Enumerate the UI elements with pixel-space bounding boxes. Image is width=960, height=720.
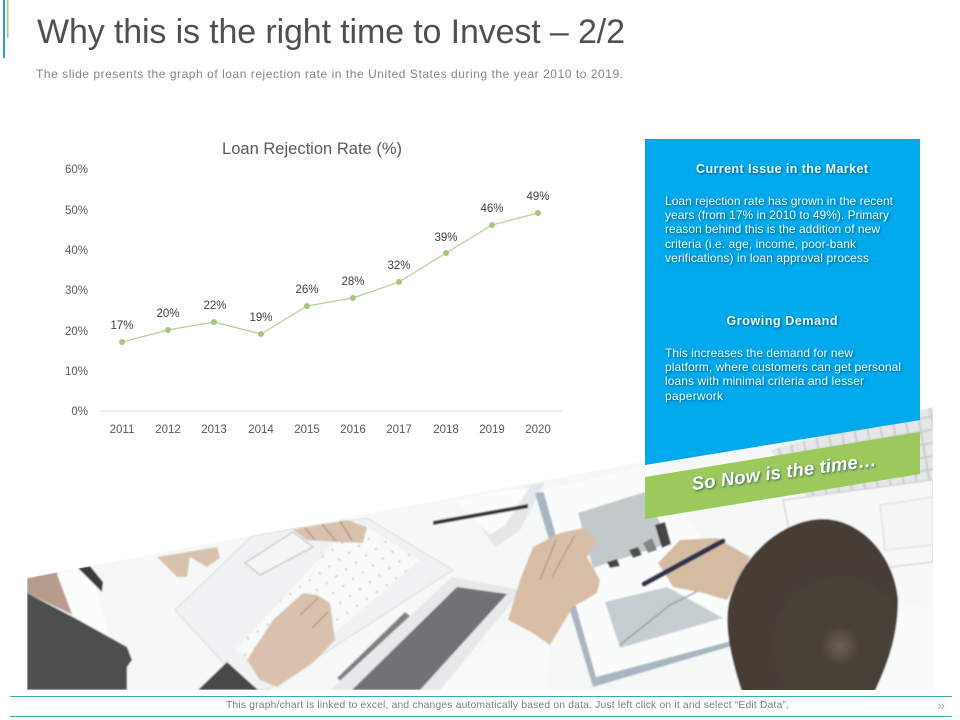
right person's flat hand and sleeve: [508, 528, 600, 646]
x axis labels: 2017: [386, 424, 412, 436]
heading: growing demand: Growing Demand: [726, 314, 838, 328]
x axis labels: 2020: [525, 424, 551, 436]
y axis labels: 0%: [71, 406, 88, 418]
data markers: [119, 210, 541, 345]
x axis labels: 2018: [433, 424, 459, 436]
photo: business people working at a desk: [20, 400, 940, 695]
y axis labels: 50%: [65, 205, 88, 217]
writing hand: [658, 538, 750, 600]
header accent lines: [3, 0, 8, 58]
heading: current issue: Current Issue in the Market: [696, 162, 869, 176]
text block: growing demand: This increases the demand for new: [665, 346, 853, 360]
text block: current issue: criteria (i.e. age, income, poor-bank: [665, 237, 857, 251]
y axis labels: 40%: [65, 245, 88, 257]
x axis labels: 2015: [294, 424, 320, 436]
footer note: This graph/chart is linked to excel, and changes automatically based on data. Just left click on it and select “Edit Data”.: [226, 700, 789, 711]
text block: current issue: years (from 17% in 2010 to 49%). Primary: [665, 208, 889, 222]
data labels: 22%: [203, 300, 227, 312]
x axis labels: 2012: [155, 424, 181, 436]
upper-right laptop: [770, 407, 933, 570]
hands on laptop: [157, 520, 367, 687]
callout: green banner: [645, 432, 920, 519]
text block: current issue: reason behind this is the addition of new: [665, 222, 880, 236]
x axis labels: 2016: [340, 424, 366, 436]
callout: green banner: So Now is the time…: [690, 449, 878, 494]
chart title: Loan Rejection Rate (%): [222, 140, 402, 158]
data labels: [110, 191, 550, 332]
y axis labels: 30%: [65, 285, 88, 297]
panel: blue market info: [645, 139, 920, 465]
data labels: 28%: [341, 276, 365, 288]
text block: current issue: [665, 194, 894, 265]
data labels: 20%: [156, 308, 180, 320]
right person's shirt: [873, 600, 933, 690]
x axis labels: 2011: [110, 424, 134, 436]
right person's head: [727, 519, 898, 695]
subtitle: The slide presents the graph of loan rejection rate in the United States during the year 2010 to 2019.: [36, 67, 623, 81]
title: Why this is the right time to Invest – 2/2: [37, 13, 625, 51]
y axis labels: 20%: [65, 326, 88, 338]
data labels: 17%: [110, 320, 134, 332]
text block: current issue: Loan rejection rate has grown in the recent: [665, 194, 894, 208]
y axis labels: 60%: [65, 164, 88, 176]
data labels: 46%: [480, 203, 504, 215]
text block: current issue: verifications) in loan approval process: [665, 251, 869, 265]
x axis line: [100, 410, 562, 412]
data labels: 19%: [249, 312, 273, 324]
left paper and pen: [433, 482, 545, 548]
x axis labels: 2013: [201, 424, 227, 436]
document on folder: [534, 492, 731, 688]
tablet: [330, 577, 522, 690]
data line: [122, 213, 538, 342]
line chart: loan rejection rate: [65, 140, 562, 436]
y axis labels: [65, 164, 88, 418]
pen: [644, 541, 723, 584]
data labels: 39%: [434, 232, 458, 244]
text block: growing demand: platform, where customers can get personal: [665, 360, 901, 374]
data labels: 26%: [295, 284, 319, 296]
y axis labels: 10%: [65, 366, 88, 378]
text block: growing demand: paperwork: [665, 389, 724, 403]
left person: [27, 566, 132, 690]
x axis labels: 2014: [248, 424, 274, 436]
white laptop: [175, 518, 453, 690]
text block: growing demand: [665, 346, 901, 403]
footer: [10, 696, 952, 716]
data labels: 49%: [526, 191, 550, 203]
text block: growing demand: loans with minimal criteria and lesser: [665, 374, 864, 388]
x axis labels: 2019: [479, 424, 505, 436]
icon: next chevron: »: [937, 697, 945, 713]
data labels: 32%: [387, 260, 411, 272]
dark sleeve: [198, 662, 258, 690]
x axis labels: [110, 424, 551, 436]
